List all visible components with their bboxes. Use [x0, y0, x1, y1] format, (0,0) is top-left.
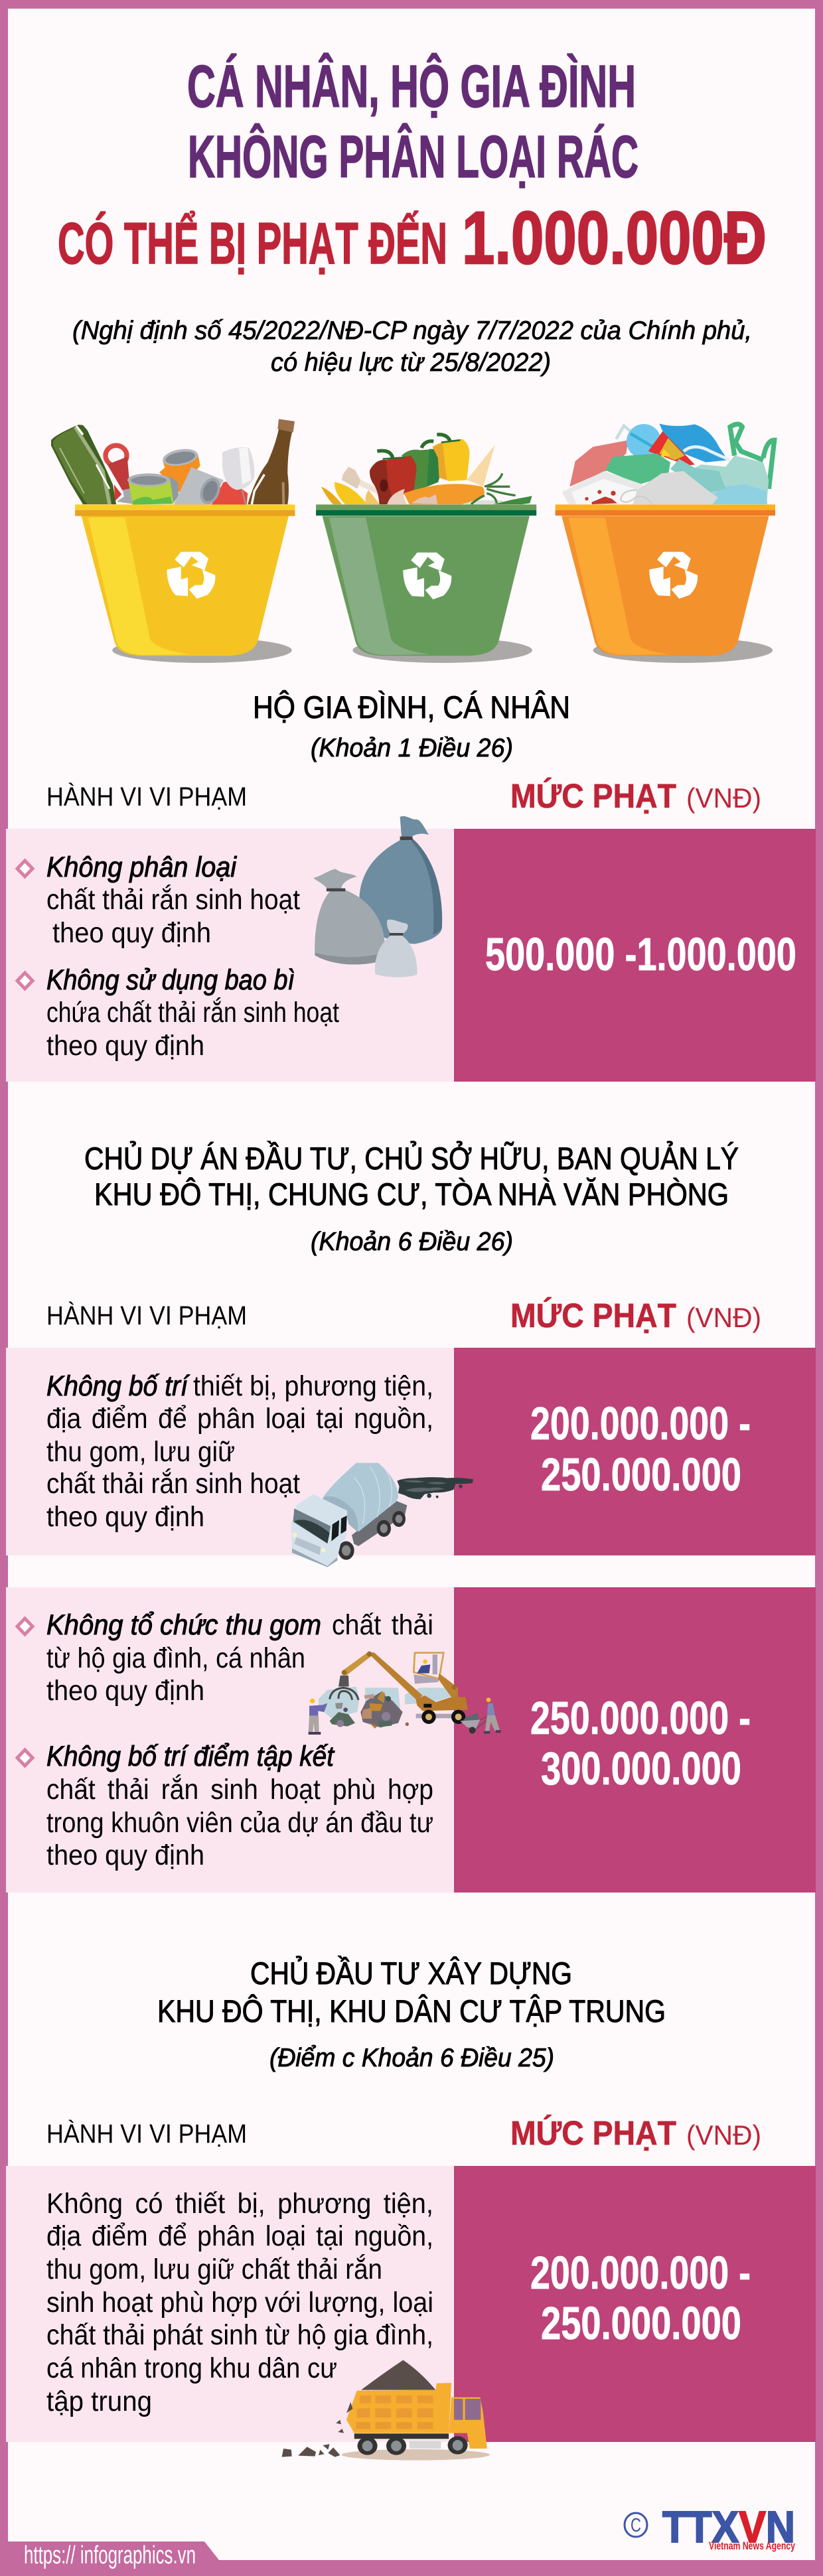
- section 3 heading: KHU ĐÔ THỊ, KHU DÂN CƯ TẬP TRUNG: [157, 1993, 666, 2029]
- section 1 column headers: [46, 777, 761, 815]
- violation text: chất thải rắn sinh hoạt: [46, 884, 300, 916]
- panel: fine amount 1: [454, 829, 816, 1082]
- violation text: Không sử dụng bao bì: [46, 964, 295, 996]
- bullet diamond: [17, 861, 33, 877]
- section 2 column headers: [46, 1297, 761, 1334]
- section 2 heading: (Khoản 6 Điều 26): [311, 1228, 513, 1256]
- section 1 heading: HỘ GIA ĐÌNH, CÁ NHÂN: [253, 689, 570, 725]
- section 2 heading: [84, 1141, 739, 1256]
- section 3 column headers: HÀNH VI VI PHẠM: [46, 2119, 247, 2149]
- panel: violations, project owners A: theo quy định: [46, 1501, 204, 1533]
- panel: fine amount 4: 200.000.000 -: [530, 2247, 751, 2299]
- icon: excavator and workers: [309, 1652, 501, 1735]
- panel: violations, developers: [6, 2166, 454, 2442]
- panel: fine amount 4: 250.000.000: [541, 2297, 741, 2349]
- bullet diamond: [17, 973, 33, 989]
- title: [58, 52, 767, 279]
- panel: violations, project owners A: địa điểm để phân loại tại nguồn,: [46, 1403, 433, 1435]
- orange bin: [556, 504, 775, 663]
- section 3 column headers: [46, 2114, 761, 2152]
- panel: violations, project owners A: thiết bị, phương tiện,: [193, 1370, 433, 1402]
- panel: fine amount 2: 250.000.000: [541, 1449, 741, 1500]
- violation text: [46, 1609, 433, 1871]
- panel: violations, developers: tập trung: [46, 2386, 152, 2417]
- orange bin contents: [562, 423, 775, 504]
- icon: mixer truck: [291, 1463, 473, 1567]
- section 1 column headers: HÀNH VI VI PHẠM: [46, 782, 247, 812]
- panel: fine amount 4: [454, 2166, 816, 2442]
- green bin: [316, 504, 536, 663]
- violation text: Không phân loại: [46, 851, 237, 883]
- section 2 heading: KHU ĐÔ THỊ, CHUNG CƯ, TÒA NHÀ VĂN PHÒNG: [94, 1177, 729, 1212]
- green bin contents: [321, 435, 532, 505]
- panel: violations, project owners B: [6, 1587, 454, 1893]
- panel: violations, developers: Không có thiết bị, phương tiện,: [46, 2188, 433, 2220]
- logo: TTXVN Vietnam News Agency: TTXVN: [662, 2502, 795, 2552]
- section 3 heading: [157, 1956, 666, 2072]
- logo: TTXVN Vietnam News Agency: C: [631, 2515, 641, 2536]
- violation text: chất thải rắn sinh hoạt phù hợp: [46, 1774, 433, 1806]
- violation text: Không bố trí điểm tập kết: [46, 1741, 335, 1772]
- section 2 heading: CHỦ DỰ ÁN ĐẦU TƯ, CHỦ SỞ HỮU, BAN QUẢN LÝ: [84, 1141, 739, 1176]
- panel: violations, developers: thu gom, lưu giữ chất thải rắn: [46, 2254, 382, 2285]
- panel: violations, developers: chất thải phát sinh từ hộ gia đình,: [46, 2319, 433, 2351]
- section 1 heading: (Khoản 1 Điều 26): [311, 734, 513, 762]
- section 1 column headers: MỨC PHẠT: [510, 777, 676, 815]
- violation text: trong khuôn viên của dự án đầu tư: [46, 1807, 433, 1839]
- panel: violations, developers: cá nhân trong khu dân cư: [46, 2352, 337, 2384]
- violation text: [46, 851, 339, 1062]
- section 2 column headers: HÀNH VI VI PHẠM: [46, 1301, 247, 1330]
- panel: fine amount 3: [454, 1587, 816, 1893]
- icon: garbage bags: [313, 816, 442, 977]
- panel: fine amount 3: 250.000.000 -: [530, 1692, 751, 1744]
- section 2 column headers: MỨC PHẠT: [510, 1297, 676, 1334]
- violation text: Không tổ chức thu gom: [46, 1609, 321, 1641]
- section 3 column headers: MỨC PHẠT: [510, 2114, 676, 2152]
- bullet diamond: [17, 1618, 33, 1634]
- panel: violations, project owners A: [6, 1348, 454, 1555]
- panel: fine amount 3: 300.000.000: [541, 1743, 741, 1794]
- subtitle: legal reference: có hiệu lực từ 25/8/2022): [271, 348, 551, 377]
- subtitle: legal reference: [72, 317, 752, 377]
- section 3 heading: (Điểm c Khoản 6 Điều 25): [269, 2044, 554, 2072]
- footer tab with website: https:// infographics.vn: [24, 2541, 196, 2569]
- title: CÓ THỂ BỊ PHẠT ĐẾN: [58, 210, 447, 276]
- illustration: three recycling bins: [51, 419, 775, 663]
- violation text: chất thải: [332, 1609, 433, 1641]
- section 2 column headers: (VNĐ): [686, 1302, 761, 1333]
- panel: violations, project owners A: chất thải rắn sinh hoạt: [46, 1468, 300, 1500]
- panel: violations, households: [6, 829, 454, 1082]
- section 3 heading: CHỦ ĐẦU TƯ XÂY DỰNG: [250, 1956, 572, 1991]
- panel: violations, project owners A: thu gom, lưu giữ: [46, 1436, 235, 1468]
- section 1 heading: [253, 689, 570, 762]
- panel: violations, project owners A: Không bố trí: [46, 1370, 190, 1402]
- violation text: theo quy định: [46, 1675, 204, 1707]
- yellow bin contents: [51, 419, 295, 507]
- panel: violations, developers: sinh hoạt phù hợp với lượng, loại: [46, 2287, 433, 2319]
- section 3 column headers: (VNĐ): [686, 2119, 761, 2151]
- panel: violations, developers: địa điểm để phân loại tại nguồn,: [46, 2220, 433, 2252]
- panel: fine amount 2: 200.000.000 -: [530, 1397, 751, 1449]
- bullet diamond: [17, 1750, 33, 1766]
- violation text: từ hộ gia đình, cá nhân: [46, 1642, 305, 1674]
- violation text: chứa chất thải rắn sinh hoạt: [46, 997, 339, 1029]
- violation text: theo quy định: [52, 917, 211, 949]
- violation text: theo quy định: [46, 1839, 204, 1871]
- subtitle: legal reference: (Nghị định số 45/2022/NĐ-CP ngày 7/7/2022 của Chính phủ,: [72, 317, 752, 345]
- section 1 column headers: (VNĐ): [686, 782, 761, 814]
- violation text: theo quy định: [46, 1030, 204, 1062]
- yellow bin: [75, 504, 295, 663]
- panel: fine amount 2: [454, 1348, 816, 1555]
- icon: dump truck: [282, 2360, 490, 2461]
